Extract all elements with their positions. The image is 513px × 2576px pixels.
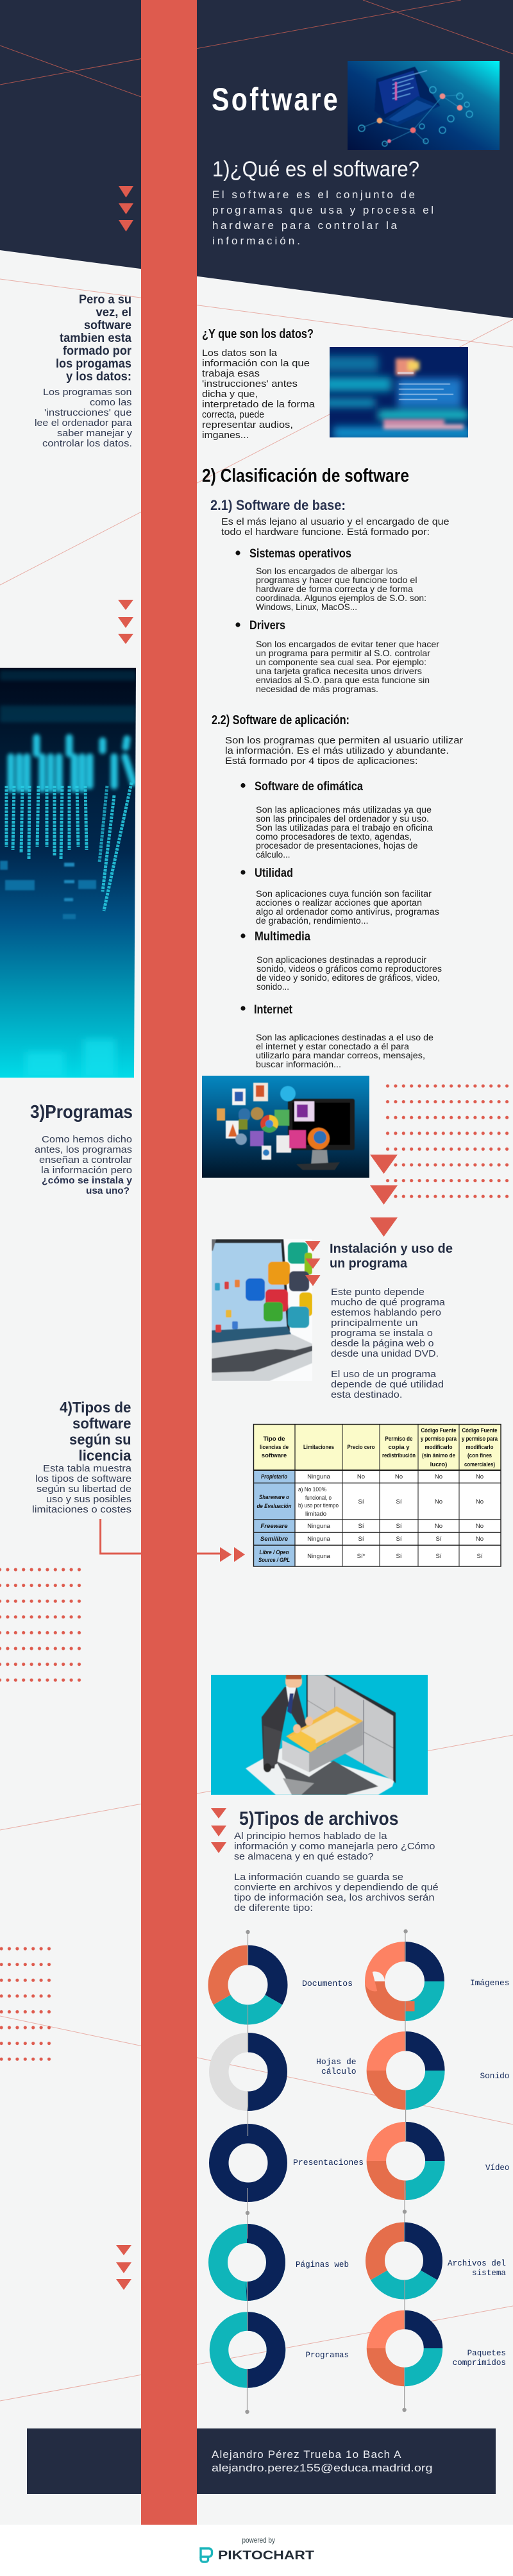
- text: instalacion: mucho de qué programa: [331, 1297, 446, 1308]
- text: software de aplicacion: la información. Es el más utilizado y abundante.: [225, 745, 449, 756]
- label: archivos del sistema: [448, 2258, 506, 2278]
- image: code columns: [0, 668, 136, 1078]
- heading: instalacion y uso: un programa: [330, 1256, 408, 1271]
- label: programas: Programas: [305, 2350, 349, 2360]
- text: programas: [35, 1134, 133, 1196]
- image: apps and monitor: [202, 1076, 369, 1178]
- triangles top left: [119, 186, 133, 232]
- heading: instalacion y uso: [330, 1241, 453, 1271]
- table: software licences: Sí: [435, 1553, 442, 1560]
- text: programas instrucciones: lee el ordenador para: [35, 418, 132, 428]
- heading: programas: 3)Programas: [30, 1102, 133, 1123]
- text: programas: usa uno?: [86, 1185, 130, 1196]
- label: hojas de calculo: Hojas de: [316, 2057, 357, 2067]
- list item: internet: buscar información...: [256, 1060, 341, 1069]
- footer author text: alejandro.perez155@educa.madrid.org: [212, 2462, 432, 2474]
- list item: internet: utilizarlo para mandar correos, mensajes,: [256, 1051, 425, 1060]
- text: tipos de archivos: información y como manejarla pero ¿Cómo: [234, 1841, 435, 1852]
- table: software licences: Ninguna: [307, 1473, 331, 1480]
- list item: drivers: necesidad de más programas.: [256, 684, 378, 694]
- text: programas: enseñan a controlar: [39, 1155, 132, 1165]
- text: datos: correcta, puede: [202, 409, 264, 420]
- table: software licences: No: [476, 1498, 484, 1505]
- text: programas instrucciones: saber manejar y: [57, 428, 133, 439]
- text: tipos de archivos: de diferente tipo:: [234, 1902, 313, 1913]
- label: presentaciones: Presentaciones: [293, 2158, 364, 2167]
- text: datos: dicha y que,: [202, 389, 258, 400]
- donut: paginas web: [218, 2233, 276, 2291]
- donut: hojas de calculo: [219, 2042, 278, 2101]
- footer author text: Alejandro Pérez Trueba 1o Bach A: [212, 2448, 401, 2461]
- list item: sistemas operativos: hardware de forma correcta y de forma: [256, 584, 414, 594]
- text: datos: trabaja esas: [202, 368, 260, 379]
- table: software licences: Código Fuente: [421, 1427, 457, 1434]
- heading: tipos de archivos: 5)Tipos de archivos: [239, 1808, 399, 1829]
- label: archivos del sistema: Archivos del: [448, 2258, 506, 2268]
- text: datos: información con la que: [202, 358, 310, 369]
- table: software licences: Sí: [476, 1553, 483, 1560]
- footer author text: [212, 2448, 432, 2474]
- table: software licences: Código Fuente: [462, 1427, 498, 1434]
- heading: programas y datos: formado por: [63, 344, 131, 358]
- intro paragraph: información.: [212, 235, 300, 247]
- heading: programas y datos: software: [84, 318, 131, 332]
- image: filing cabinet man: [211, 1675, 428, 1795]
- text: programas: antes, los programas: [35, 1144, 132, 1155]
- table: software licences: licencias de: [260, 1444, 289, 1451]
- text: tipos de software: limitaciones o costes: [32, 1504, 131, 1515]
- label: hojas de calculo: cálculo: [321, 2067, 357, 2076]
- subheading: software de aplicacion: 2.2) Software de aplicación:: [212, 713, 349, 727]
- label: paquetes comprimidos: comprimidos: [453, 2358, 506, 2368]
- text: programas: la información pero: [41, 1165, 132, 1176]
- text: instalacion: desde la página web o: [331, 1338, 433, 1349]
- dot pattern right: [384, 1081, 510, 1200]
- text: tipos de software: [32, 1463, 132, 1515]
- table: software licences: Libre / Open: [259, 1549, 289, 1556]
- list item: sistemas operativos: Son los encargados de albergar los: [256, 566, 398, 576]
- donut: documentos: [218, 1955, 278, 2015]
- list item: ofimatica: Software de ofimática: [255, 779, 363, 793]
- text: tipos de software: los tipos de software: [35, 1473, 131, 1484]
- list item: utilidad: Son aplicaciones cuya función son facilitar: [256, 889, 432, 899]
- table: software licences: Sí: [396, 1523, 402, 1530]
- heading: datos: ¿Y que son los datos?: [202, 327, 314, 341]
- list item: ofimatica: cálculo...: [256, 850, 290, 860]
- table: software licences: redistribución: [382, 1452, 416, 1459]
- list item: utilidad: Utilidad: [255, 866, 293, 880]
- text: datos: imganes...: [202, 430, 249, 441]
- text: instalacion: principalmente un: [331, 1318, 418, 1328]
- table: software licences: No: [435, 1523, 442, 1530]
- table: software licences: lucro): [430, 1461, 447, 1468]
- text: software de base: [221, 516, 449, 538]
- list item: ofimatica: Son las aplicaciones más utilizadas ya que: [256, 805, 432, 815]
- list item: drivers: una tarjeta grafica necesita unos drivers: [256, 666, 422, 676]
- table: software licences: Sí*: [357, 1553, 366, 1560]
- table: software licences: limitado: [305, 1511, 326, 1518]
- table: software licences: Sí: [396, 1553, 402, 1560]
- text: instalacion: Este punto depende: [331, 1287, 425, 1298]
- list item: multimedia: sonido...: [256, 982, 289, 992]
- donut: presentaciones: [219, 2133, 278, 2192]
- list item: utilidad: algo al ordenador como antivirus, programas: [256, 907, 439, 917]
- list item: internet: [240, 1003, 433, 1069]
- text: software de base: Es el más lejano al usuario y el encargado de que: [221, 516, 449, 527]
- table: software licences: modificarlo: [466, 1444, 494, 1451]
- heading: tipos de software: [60, 1399, 131, 1464]
- list item: sistemas operativos: [235, 547, 426, 612]
- subheading: software de base: 2.1) Software de base:: [210, 497, 346, 513]
- title: Software: [212, 81, 340, 117]
- heading: programas y datos: tambien esta: [60, 331, 131, 345]
- table: software licences: de Evaluación: [256, 1503, 292, 1510]
- list item: ofimatica: [240, 779, 433, 860]
- stems right column: [402, 1929, 408, 2412]
- heading: programas y datos: y los datos:: [66, 369, 131, 384]
- table: software licences: Shareware o: [259, 1494, 289, 1501]
- list item: drivers: Son los encargados de evitar tener que hacer: [256, 640, 440, 649]
- table: software licences: y permiso para: [462, 1436, 498, 1443]
- list item: multimedia: [240, 929, 442, 992]
- list item: internet: Son las aplicaciones destinadas a el uso de: [256, 1033, 433, 1042]
- table: software licences: No: [476, 1523, 484, 1530]
- text: datos: representar audios,: [202, 419, 293, 430]
- text: software de aplicacion: Son los programas que permiten al usuario utilizar: [225, 735, 463, 746]
- big triangles: [370, 1155, 398, 1237]
- table: software licences: No: [476, 1473, 484, 1480]
- list item: ofimatica: procesador de presentaciones, hojas de: [256, 841, 418, 851]
- vertical red bar: [141, 0, 197, 2525]
- list item: utilidad: acciones o realizar acciones que aportan: [256, 898, 422, 908]
- heading: que es el software: 1)¿Qué es el software?: [212, 157, 419, 182]
- text: programas instrucciones: Los programas son: [43, 387, 132, 398]
- donut: video: [376, 2131, 435, 2190]
- heading: programas y datos: los progamas: [56, 357, 131, 371]
- triangles beside archivos heading: [211, 1808, 226, 1853]
- text: programas instrucciones: [35, 387, 133, 449]
- table: software licences: No: [435, 1498, 442, 1505]
- footer band: [27, 2428, 496, 2494]
- dot pattern left lower: [0, 1944, 51, 2063]
- heading: programas y datos: Pero a su: [79, 292, 131, 307]
- text: software de aplicacion: [225, 735, 463, 767]
- text: programas instrucciones: controlar los datos.: [42, 438, 132, 449]
- label: paquetes comprimidos: [453, 2348, 506, 2368]
- powered by: powered by: [242, 2536, 275, 2545]
- heading: clasificacion: 2) Clasificación de software: [202, 466, 409, 486]
- table: software licences: [253, 1424, 501, 1566]
- text: instalacion: El uso de un programa: [331, 1369, 437, 1380]
- text: instalacion: estemos hablando pero: [331, 1307, 441, 1318]
- text: software de base: todo el hardware funcione. Está formado por:: [221, 527, 430, 538]
- text: programas: Como hemos dicho: [42, 1134, 132, 1145]
- table: software licences: Sí: [358, 1523, 364, 1530]
- image: laptop with code: [348, 61, 500, 150]
- table: software licences: software: [262, 1452, 287, 1459]
- table: software licences: Propietario: [261, 1473, 287, 1480]
- list item: utilidad: [240, 866, 439, 926]
- list item: drivers: un componente sea cual sea. Por ejemplo:: [256, 657, 426, 667]
- label: imagenes: Imágenes: [470, 1978, 509, 1988]
- label: sonido: Sonido: [480, 2071, 509, 2081]
- table: software licences: Permiso de: [385, 1436, 413, 1443]
- label: hojas de calculo: [316, 2057, 357, 2076]
- table: software licences: No: [476, 1536, 484, 1543]
- table: software licences: Ninguna: [307, 1553, 331, 1560]
- table: software licences: comerciales): [464, 1461, 495, 1468]
- table: software licences: Ninguna: [307, 1523, 331, 1530]
- table: software licences: funcional, o: [305, 1495, 332, 1502]
- heading: instalacion y uso: Instalación y uso de: [330, 1241, 453, 1256]
- list item: sistemas operativos: Windows, Linux, MacOS...: [256, 602, 357, 612]
- image: data screen: [324, 347, 471, 439]
- intro paragraph: [212, 189, 433, 247]
- text: software de aplicacion: Está formado por 4 tipos de aplicaciones:: [225, 756, 418, 767]
- arrow connector to table: [101, 1519, 245, 1562]
- table: software licences: modificarlo: [425, 1444, 453, 1451]
- text: tipos de software: uso y sus posibles: [46, 1494, 131, 1505]
- text: tipos de archivos: La información cuando se guarda se: [234, 1872, 403, 1883]
- table: software licences: Precio cero: [348, 1444, 375, 1451]
- table: software licences: Sí: [396, 1536, 402, 1543]
- heading: tipos de software: según su: [69, 1431, 131, 1448]
- heading: tipos de software: licencia: [78, 1447, 131, 1464]
- table: software licences: No: [357, 1473, 365, 1480]
- heading: tipos de software: software: [72, 1415, 131, 1432]
- dot pattern left upper: [0, 1565, 81, 1684]
- text: tipos de archivos: [234, 1831, 439, 1913]
- list item: sistemas operativos: Sistemas operativos: [249, 547, 351, 561]
- table: software licences: Freeware: [260, 1523, 288, 1530]
- icon: piktochart logo: [201, 2548, 212, 2562]
- table: software licences: Tipo de: [264, 1436, 285, 1443]
- table: software licences: Sí: [358, 1498, 364, 1505]
- text: tipos de software: según su libertad de: [37, 1484, 131, 1495]
- list item: ofimatica: son las principales del ordenador y su uso.: [256, 814, 429, 824]
- list item: internet: el internet y estar conectado a él para: [256, 1042, 410, 1051]
- intro paragraph: El software es el conjunto de: [212, 189, 415, 201]
- table: software licences: No: [435, 1473, 442, 1480]
- table: software licences: a) No 100%: [298, 1486, 326, 1493]
- list item: multimedia: Son aplicaciones destinadas a reproducir: [256, 955, 427, 965]
- piktochart wordmark: PIKTOCHART: [218, 2548, 314, 2563]
- footer background: [0, 2525, 513, 2576]
- list item: drivers: Drivers: [249, 618, 285, 632]
- text: tipos de archivos: tipo de información sea, los archivos serán: [234, 1892, 435, 1903]
- list item: ofimatica: como procesadores de texto, agendas,: [256, 832, 412, 842]
- list item: sistemas operativos: coordinada. Algunos ejemplos de S.O. son:: [256, 593, 426, 603]
- text: instalacion: esta destinado.: [331, 1389, 403, 1400]
- text: instalacion: desde una unidad DVD.: [331, 1348, 439, 1359]
- list item: ofimatica: Son las utilizadas para el trabajo en oficina: [256, 823, 433, 833]
- table: software licences: Sí: [396, 1498, 402, 1505]
- triangles middle left: [118, 600, 133, 644]
- list item: internet: Internet: [254, 1003, 292, 1017]
- label: documentos: Documentos: [302, 1979, 353, 1988]
- table: software licences: (con fines: [467, 1452, 492, 1459]
- image: laptop with app icons: [212, 1239, 312, 1381]
- label: paginas web: Páginas web: [296, 2260, 349, 2269]
- table: software licences: Limitaciones: [303, 1444, 334, 1451]
- text: tipos de archivos: se almacena y en qué estado?: [234, 1851, 373, 1862]
- text: programas instrucciones: 'instrucciones' que: [44, 407, 132, 418]
- list item: multimedia: sonido, videos o gráficos como reproductores: [256, 964, 442, 974]
- triangles over laptop image: [305, 1241, 321, 1286]
- stems left column: [245, 1930, 250, 2414]
- table: software licences: (sin ánimo de: [422, 1452, 455, 1459]
- donut: paquetes comprimidos: [376, 2319, 433, 2377]
- table: software licences: copia y: [388, 1444, 410, 1451]
- intro paragraph: programas que usa y procesa el: [212, 204, 433, 216]
- label: video: Vídeo: [485, 2163, 509, 2173]
- donut: imagenes: [374, 1951, 435, 2012]
- label: paquetes comprimidos: Paquetes: [467, 2348, 506, 2358]
- donut: archivos del sistema: [375, 2232, 433, 2290]
- donut: sonido: [376, 2041, 435, 2100]
- list item: multimedia: Multimedia: [255, 929, 310, 944]
- donut: programas: [219, 2321, 276, 2378]
- table: software licences: b) uso por tiempo: [298, 1502, 339, 1509]
- text: instalacion: programa se instala o: [331, 1328, 433, 1339]
- header dark background: [0, 0, 513, 318]
- table: software licences: Ninguna: [307, 1536, 331, 1543]
- text: datos: [202, 348, 315, 441]
- heading: tipos de software: 4)Tipos de: [60, 1399, 131, 1416]
- list item: drivers: [235, 618, 440, 694]
- intro paragraph: hardware para controlar la: [212, 219, 398, 232]
- table: software licences: Sí: [435, 1536, 442, 1543]
- list item: sistemas operativos: programas y hacer que funcione todo el: [256, 575, 417, 585]
- text: tipos de archivos: Al principio hemos hablado de la: [234, 1831, 387, 1842]
- text: programas: ¿cómo se instala y: [42, 1175, 133, 1186]
- text: instalacion: depende de qué utilidad: [331, 1379, 444, 1390]
- table: software licences: No: [395, 1473, 403, 1480]
- text: datos: Los datos son la: [202, 348, 278, 359]
- list item: drivers: un programa para permitir al S.O. controlar: [256, 648, 431, 658]
- list item: utilidad: de grabación, rendimiento...: [256, 916, 368, 926]
- text: instalacion: [331, 1287, 446, 1400]
- table: software licences: Semilibre: [260, 1536, 289, 1543]
- table: software licences: Source / GPL: [258, 1557, 290, 1564]
- text: datos: 'instrucciones' antes: [202, 378, 298, 389]
- heading: programas y datos: [56, 292, 131, 384]
- table: software licences: Sí: [358, 1536, 364, 1543]
- triangles lower left: [116, 2245, 131, 2290]
- heading: programas y datos: vez, el: [96, 305, 131, 319]
- text: programas instrucciones: como las: [90, 397, 132, 408]
- text: tipos de archivos: convierte en archivos y dependiendo de qué: [234, 1882, 439, 1893]
- list item: drivers: enviados al S.O. para que esta funcione sin: [256, 675, 430, 685]
- label: archivos del sistema: sistema: [472, 2268, 506, 2278]
- table: software licences: y permiso para: [421, 1436, 457, 1443]
- list item: multimedia: de video y sonido, editores de gráficos, video,: [256, 973, 440, 983]
- text: tipos de software: Esta tabla muestra: [43, 1463, 132, 1474]
- text: datos: interpretado de la forma: [202, 399, 315, 410]
